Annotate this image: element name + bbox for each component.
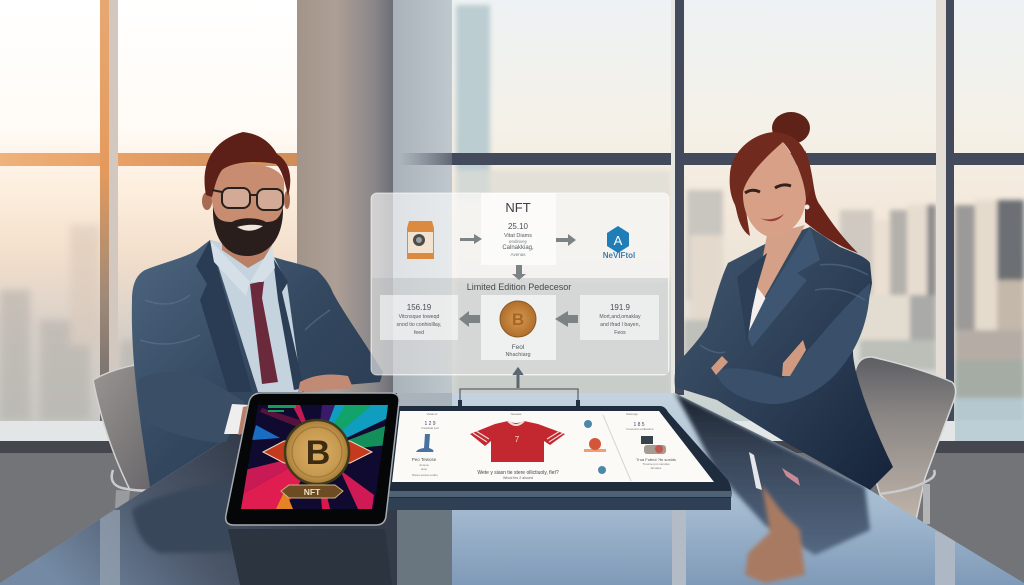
arrow: NFT down [512,265,526,280]
collar [210,240,275,296]
left column: 1 2 9 [424,421,436,427]
icon: red jersey: 7 [515,435,520,444]
screen [392,411,714,482]
neck and chest [757,225,805,300]
box: left stat: Vitcnsque toweqd [399,314,440,320]
window background: right panes and skyline [452,0,1024,422]
screen dividers [603,415,631,481]
left column: Fauidual ssd [421,426,439,430]
window strips [100,510,120,585]
eyes [745,185,791,193]
left column: Peo Tewose [412,457,437,462]
box: top center NFT: 25.10 [508,222,529,231]
box: center coin [481,295,556,360]
neck [222,225,272,268]
person: man [132,132,383,487]
box: right stat: Feos [614,330,626,336]
lapel left [196,240,252,392]
glasses [212,188,283,210]
sleeve folds [700,264,868,353]
box: top center NFT: endinvey [509,239,528,244]
right column: Trua Fufeut ?te sostds [636,457,676,462]
man: forearm over table [138,372,353,443]
box: left stat [380,295,458,340]
building columns [297,0,452,422]
bun [772,112,810,144]
box: center coin: Feol [512,344,525,351]
suit wrinkles [140,295,330,344]
caption: Wete y siasn tie stere ollictiuoly, flet? [477,470,559,476]
hands [782,340,806,376]
hair [205,132,290,197]
box: right stat: 191.9 [610,303,631,312]
lapel right [747,227,820,347]
arrow: right to coin [555,311,578,327]
small tablet: NFT [304,487,321,497]
chair: right [855,357,956,525]
large tablet: Whod fes 2 aloued [503,476,533,480]
window sill [0,421,1024,453]
box: top center NFT: Calnakkiag, [502,245,534,251]
box: left stat: snod tio conhiolllay, [397,322,441,328]
hair [730,132,813,236]
icon: blue network hexagon: A [614,233,623,248]
tie [250,281,278,384]
box: center coin: B [512,310,524,329]
box: center coin: Nhachiarg [505,352,531,358]
icon: orange product box [407,221,434,259]
lapel right [273,258,304,390]
NFT badge [281,485,343,498]
left column: Dieus sauva ondne [412,473,438,477]
chair: left [93,365,170,508]
left column: arop [421,467,427,471]
icon: blue network hexagon [607,226,629,253]
shirt [210,240,302,392]
box: left stat: feed [414,330,424,336]
right column: fanodes [651,466,662,470]
green label [268,405,296,408]
conference table [0,393,1024,585]
arrow: NFT to network [556,234,576,246]
screen [235,405,395,510]
tablet body [388,406,732,510]
large tablet [388,406,732,510]
connector bracket from tablet to panel [460,368,578,406]
ears [202,192,212,210]
box: top center NFT [481,193,556,265]
glass info panel [371,193,669,375]
face [743,142,806,237]
smile [760,214,784,221]
left column: dnoma [419,463,429,467]
large tablet: Neselas [511,412,522,416]
coin [285,420,349,484]
beard [213,207,283,256]
crossed sleeve [715,283,870,404]
box: top center NFT: Vitat Diams [504,233,532,239]
label: network: NeVIFtol [603,251,635,260]
body [226,393,399,525]
small tablet [226,393,399,525]
box: top center NFT: NFT [505,200,531,215]
large tablet: Nielunge [626,412,638,416]
small tablet: B [306,434,330,472]
right column: Trourse pun siendes [642,462,670,466]
reflection: man [132,480,232,553]
suit [132,240,383,487]
window background: left panes [0,0,297,422]
earring [804,204,810,210]
table reflections [100,393,955,585]
box: right stat: Mort,and,omaklay [599,314,641,320]
window mullions [0,0,1024,422]
ponytail [805,150,858,253]
heading: limited edition: Limited Edition Pedecesor [467,282,571,292]
box: right stat: and ifrad l bayen, [600,322,640,328]
reflection: woman skin [745,485,805,583]
right column: Foucotns uudlesdne [626,427,654,431]
box: left stat: 156.19 [407,303,432,312]
right column [626,422,676,470]
icons: right side badges [584,420,592,428]
diamonds behind coin [263,441,372,463]
arrow: box to NFT [460,234,482,244]
box: top center NFT: Avenas [511,252,526,257]
headers: Velanus [427,412,438,416]
person: woman [675,112,893,490]
right column: 1 8 5 [633,422,645,428]
reflection: small tablet [228,529,392,585]
box: right stat [580,295,659,340]
suit [675,227,893,490]
face [211,164,284,254]
blouse [748,287,767,337]
reflection: woman [675,393,870,555]
left column [412,421,439,477]
lapel left [737,253,767,343]
arrow: coin to left [459,311,480,327]
icon: red jersey [470,421,565,462]
carpet floor [0,453,1024,585]
